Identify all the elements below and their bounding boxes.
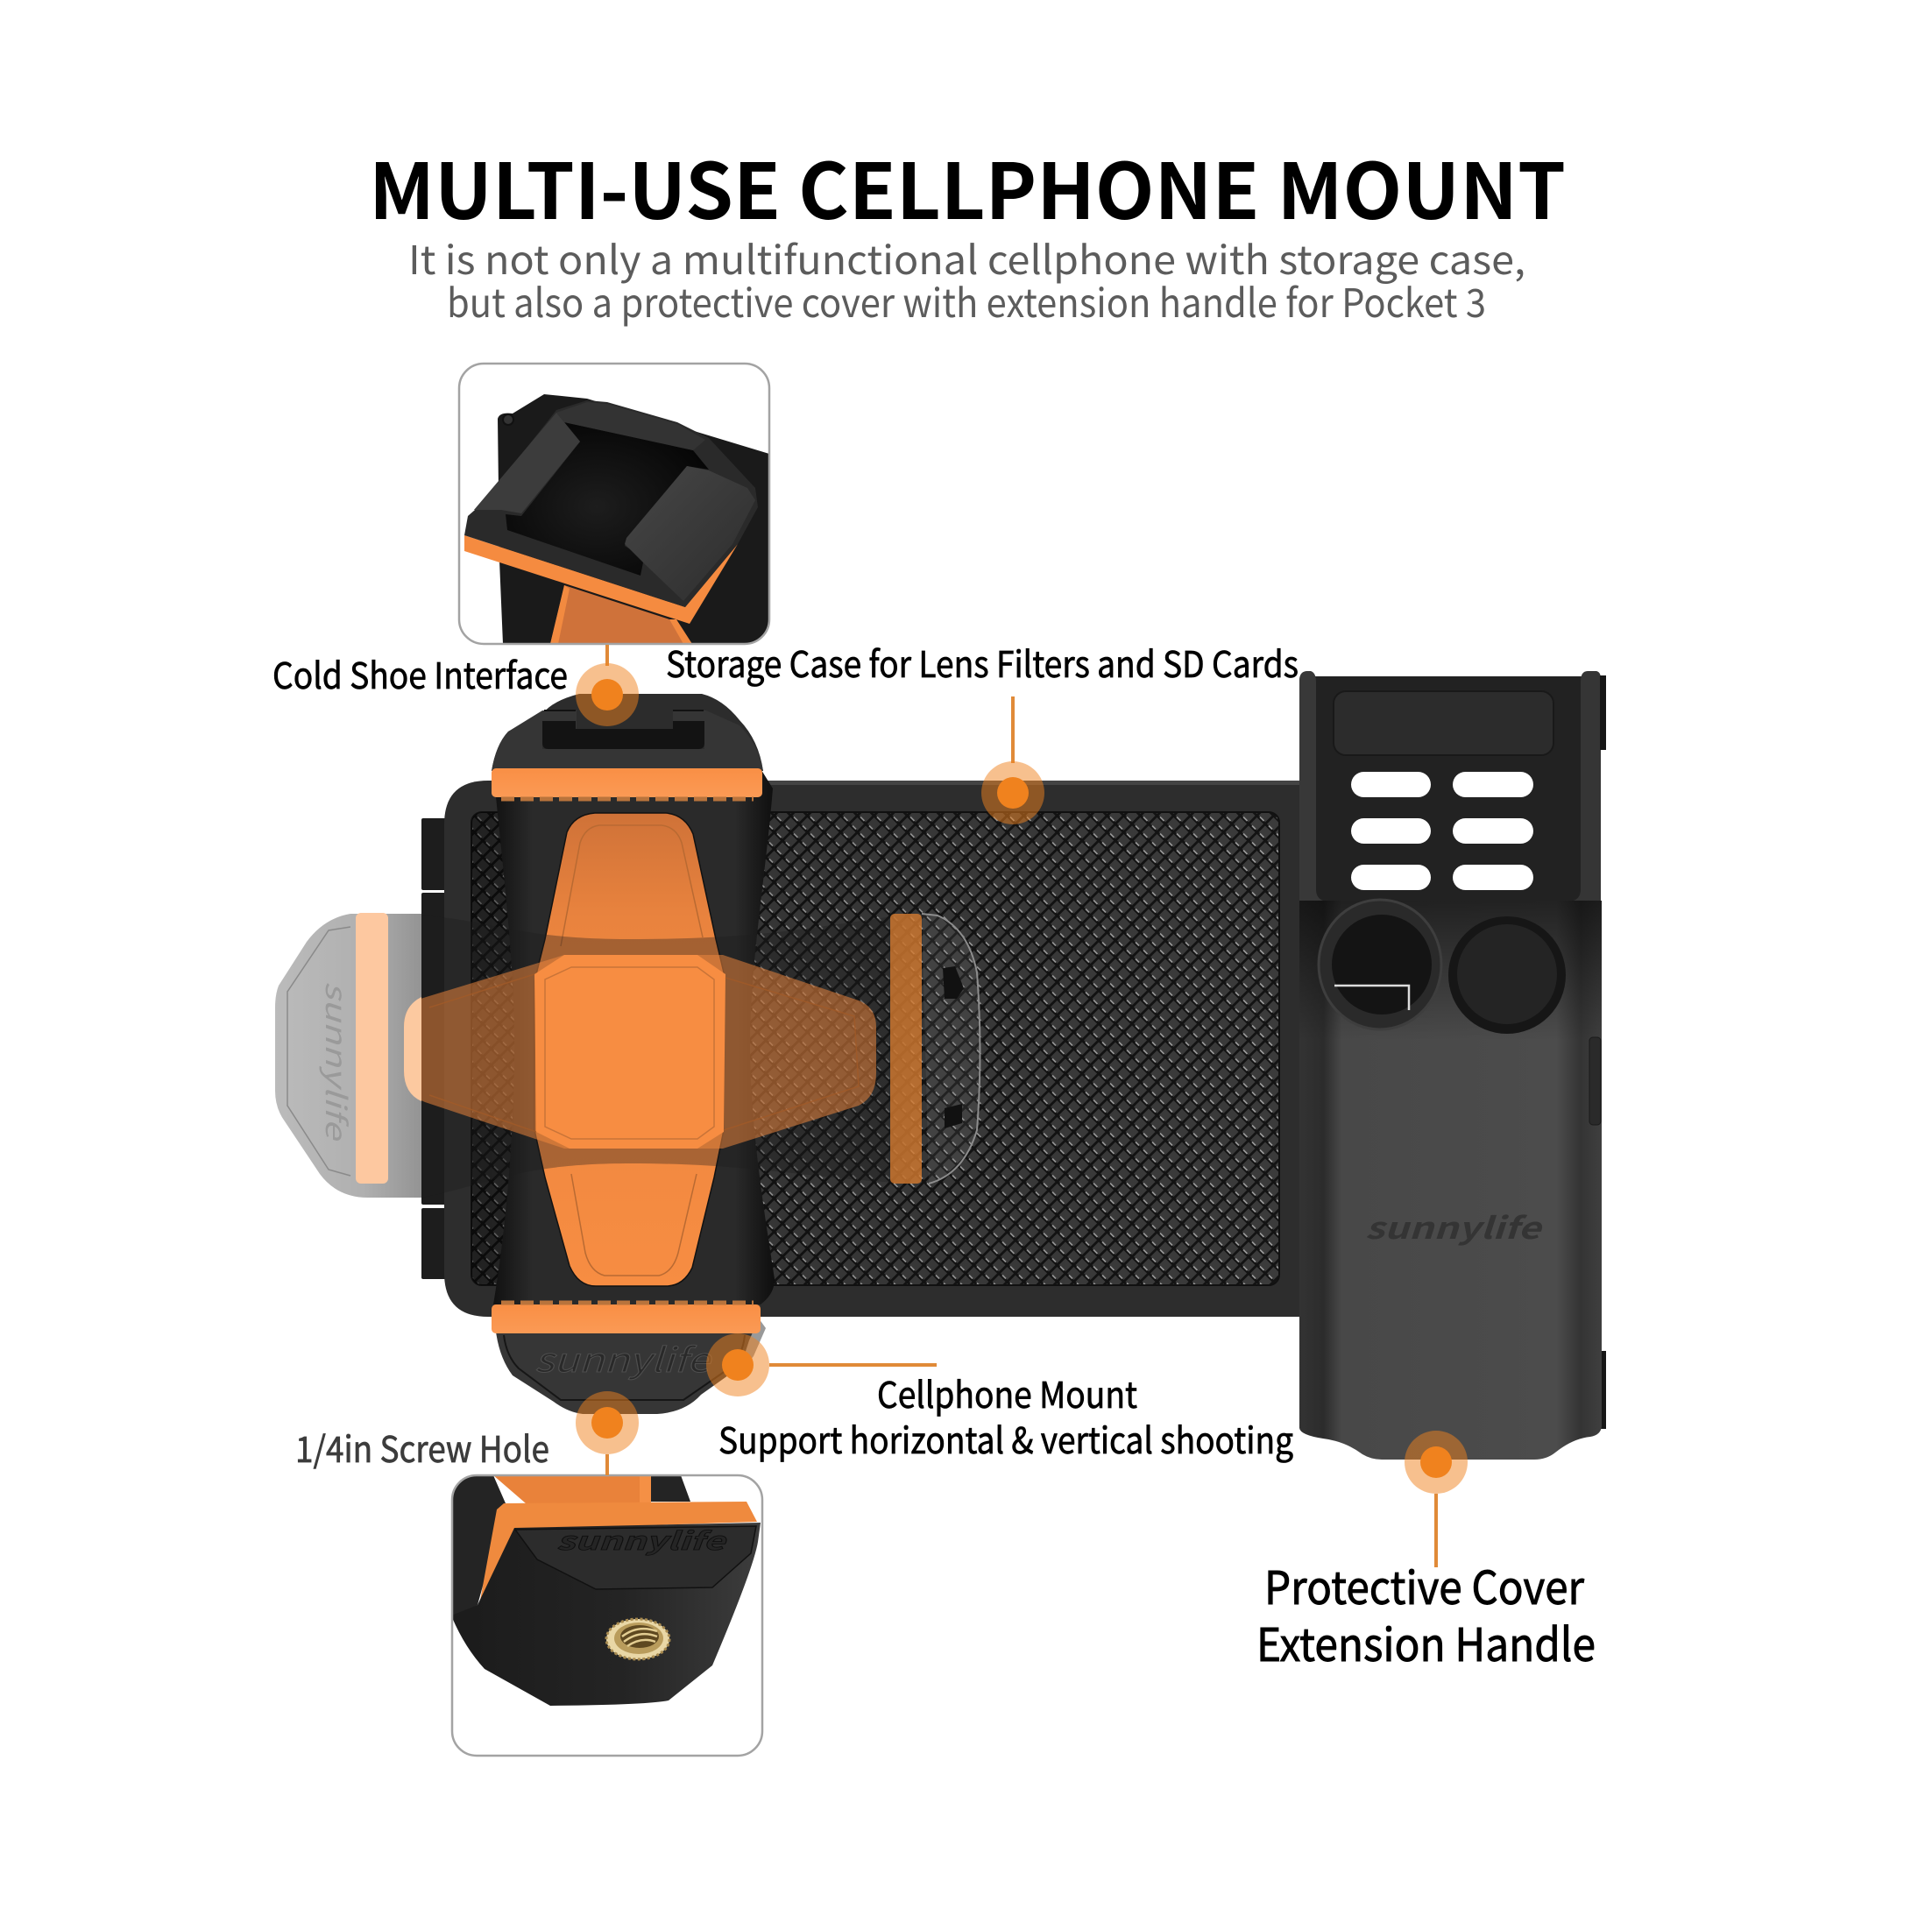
ghost horizontal clamp position bbox=[275, 913, 980, 1198]
side rails bbox=[1299, 671, 1323, 906]
cold shoe slot bbox=[542, 721, 704, 749]
textured storage panel bbox=[471, 812, 1279, 1285]
backplate bbox=[444, 781, 1306, 1317]
subtitle bbox=[408, 229, 1525, 329]
orange band bbox=[464, 535, 738, 624]
orange rim bbox=[479, 1502, 757, 1605]
vertical orange pad bbox=[534, 813, 724, 1286]
callout: protective cover: Protective Cover bbox=[1264, 1552, 1585, 1617]
main black body bbox=[451, 1523, 761, 1706]
ghost left orange band bbox=[356, 913, 388, 1184]
shoe shoulders bbox=[492, 710, 763, 771]
callout: screw hole bbox=[295, 1391, 639, 1475]
frame bbox=[459, 364, 769, 644]
dark face bbox=[515, 1526, 756, 1589]
shoe outer bbox=[464, 400, 758, 607]
ghost clamp left cap bbox=[275, 914, 421, 1198]
subtitle: It is not only a multifunctional cellphone with storage case, bbox=[408, 229, 1525, 286]
callout: cold shoe interface bbox=[272, 645, 639, 726]
clamp body bbox=[493, 770, 775, 1304]
callout: storage case: Storage Case for Lens Filters and SD Cards bbox=[666, 635, 1299, 688]
mount stud bbox=[503, 414, 513, 425]
orange back strap bbox=[493, 1475, 651, 1503]
inset: cold shoe interface bbox=[459, 364, 769, 644]
top orange band bbox=[492, 768, 762, 797]
bottom orange band bbox=[492, 1304, 761, 1333]
dark mount body bbox=[498, 394, 769, 644]
left storage cap ring bbox=[1319, 900, 1441, 1029]
centre overlap of pads bbox=[534, 955, 725, 1149]
clamp top cap bbox=[492, 694, 763, 771]
callout: cellphone mount: Cellphone Mount bbox=[877, 1366, 1137, 1418]
orange strap bbox=[550, 585, 687, 644]
bottom cap logo: sunnylife bbox=[534, 1333, 713, 1382]
callout: storage case bbox=[666, 635, 1299, 824]
right rail bbox=[625, 466, 755, 601]
callout: cellphone mount: Support horizontal & vertical shooting bbox=[718, 1411, 1293, 1464]
ghost right cap outline bbox=[922, 914, 980, 1184]
ghost right orange band bbox=[890, 914, 922, 1184]
bottom cap bbox=[496, 1332, 754, 1414]
brass screw insert bbox=[606, 1619, 669, 1659]
handle logo: sunnylife bbox=[1365, 1205, 1544, 1248]
right storage cap bbox=[1448, 916, 1566, 1034]
handle body bbox=[1299, 901, 1602, 1460]
recess bbox=[506, 422, 709, 576]
protective cover handle bbox=[1299, 671, 1606, 1460]
product: cellphone mount with handle bbox=[275, 671, 1606, 1460]
title: MULTI-USE CELLPHONE MOUNT bbox=[369, 131, 1566, 242]
ghost cap logo: sunnylife bbox=[317, 981, 357, 1142]
callout: protective cover bbox=[1256, 1431, 1596, 1674]
inset: 1/4in screw hole bbox=[451, 1475, 762, 1756]
frame bbox=[452, 1475, 762, 1756]
left rail bbox=[474, 413, 580, 513]
callout: cold shoe interface: Cold Shoe Interface bbox=[272, 647, 568, 699]
peach pad tip over ghost cap bbox=[404, 997, 421, 1101]
top bridge bbox=[556, 402, 705, 450]
callout: screw hole: 1/4in Screw Hole bbox=[295, 1420, 549, 1473]
face logo: sunnylife bbox=[556, 1523, 728, 1558]
translucent horizontal pad bbox=[404, 955, 876, 1149]
dark side pieces bbox=[451, 1475, 506, 1621]
hinge brackets bbox=[421, 818, 448, 1279]
handle upper back panel bbox=[1304, 676, 1597, 913]
callout: protective cover: Extension Handle bbox=[1256, 1608, 1596, 1674]
side button bbox=[1589, 1037, 1601, 1125]
vent slots bbox=[1351, 772, 1533, 890]
vertical clamp bbox=[492, 694, 775, 1414]
callout: cellphone mount bbox=[706, 1333, 1293, 1464]
ghost clamp translucent body bbox=[421, 914, 911, 1198]
subtitle: but also a protective cover with extension handle for Pocket 3 bbox=[447, 272, 1486, 329]
